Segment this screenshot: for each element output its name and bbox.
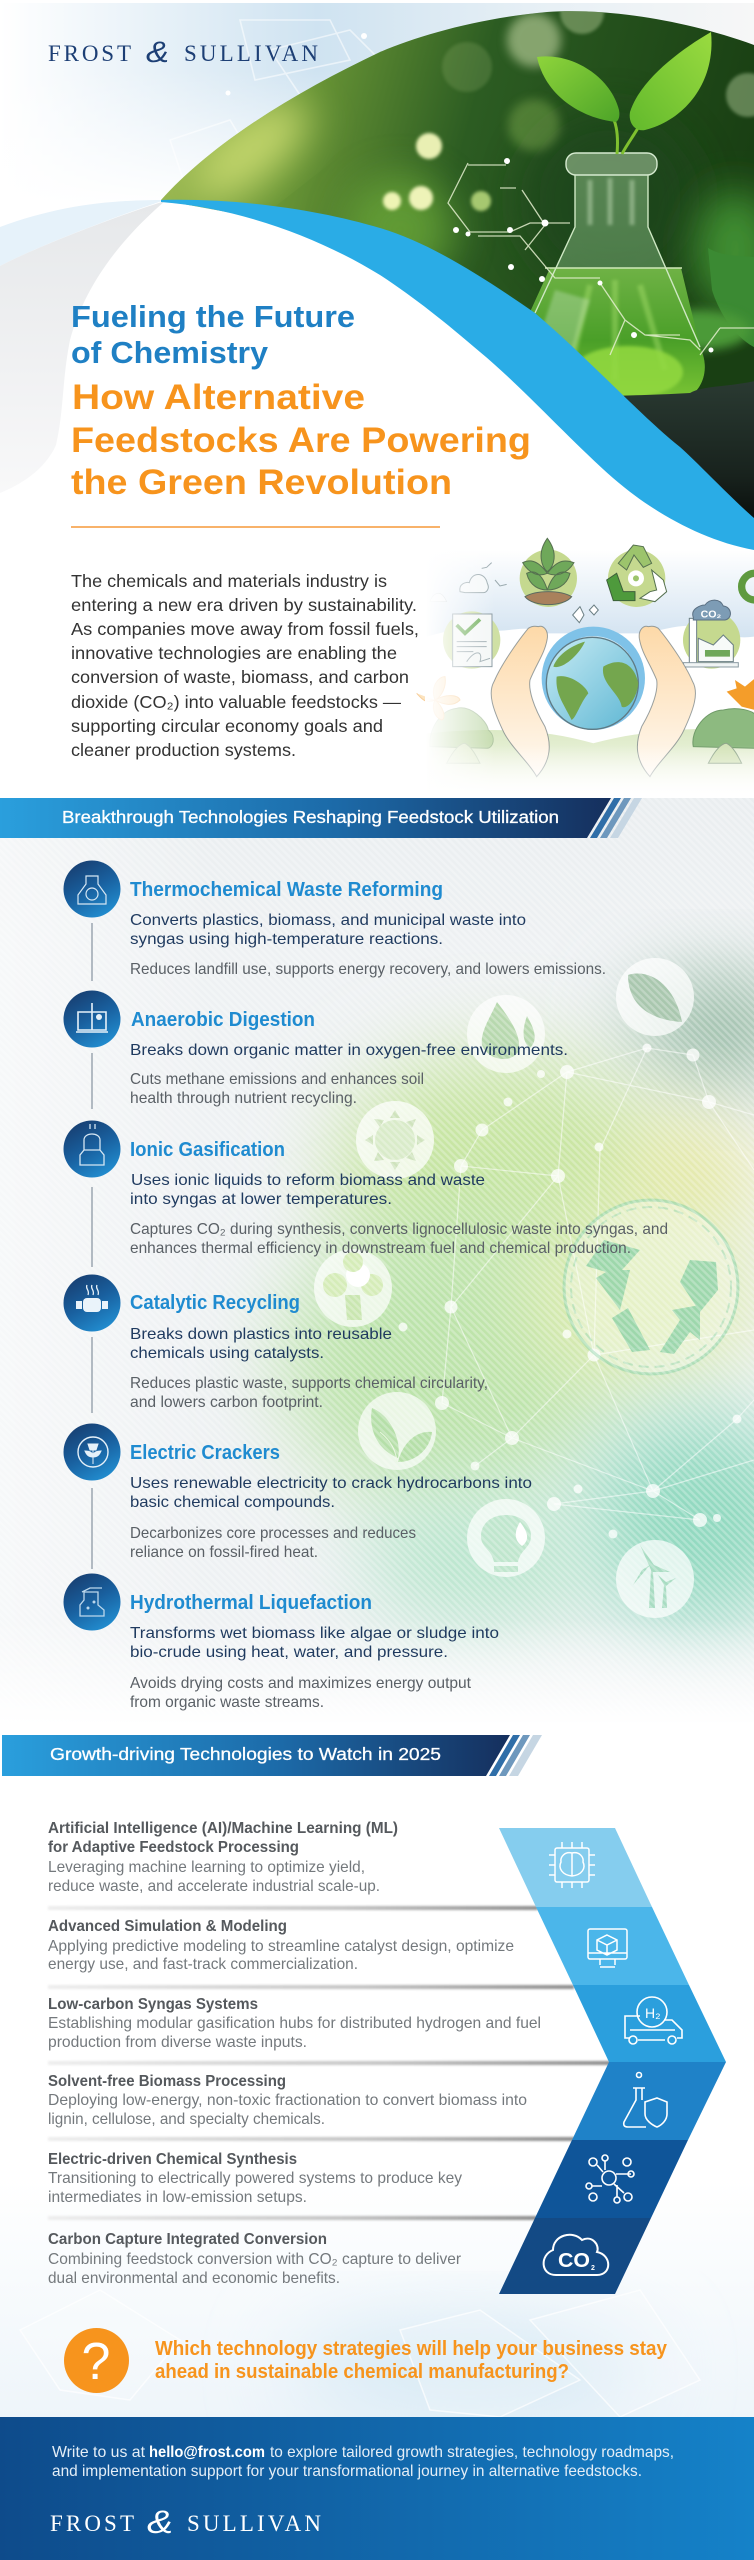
intro paragraph: supporting circular economy goals and [71,716,383,736]
intro paragraph: innovative technologies are enabling the [71,643,397,663]
intro paragraph: dioxide (CO₂) into valuable feedstocks — [71,692,401,712]
item: ionic gasification: enhances thermal efficiency in downstream fuel and chemical production. [130,1240,631,1257]
timeline connector lines [91,923,93,1569]
entry: low-carbon syngas: Establishing modular gasification hubs for distributed hydrogen and fuel [48,2015,541,2032]
entry: carbon capture: dual environmental and economic benefits. [48,2270,340,2287]
entry: electric-driven synthesis: Electric-driven Chemical Synthesis [48,2151,297,2168]
intro paragraph: conversion of waste, biomass, and carbon [71,667,409,687]
entry: AI and machine learning: reduce waste, and accelerate industrial scale-up. [48,1878,380,1895]
icon: translucent wind turbine circle [616,1540,694,1618]
item: electric crackers [64,1424,532,1561]
sprout stems and leaves [537,32,712,154]
logo top: FROST [48,41,131,66]
item: thermochemical waste reforming: syngas using high-temperature reactions. [130,931,443,948]
item: hydrothermal liquefaction: from organic waste streams. [130,1694,324,1711]
icon: translucent sun circle [356,1101,434,1179]
item: electric crackers: Electric Crackers [130,1442,280,1464]
icon: hydrogen truck [625,1997,682,2044]
footer contact text [52,2444,674,2480]
section banner: growth-driving technologies: Growth-driving Technologies to Watch in 2025 [50,1744,441,1764]
item: electric crackers: Decarbonizes core processes and reduces [130,1525,416,1542]
item: thermochemical waste reforming: Reduces landfill use, supports energy recovery, and lowers emissions. [130,961,606,978]
icon: sparkles [573,605,598,623]
title: How Alternative [72,378,365,417]
sky haze [427,550,754,637]
entry: carbon capture: Combining feedstock conversion with CO₂ capture to deliver [48,2251,462,2268]
entry: low-carbon syngas: production from diverse waste inputs. [48,2034,307,2051]
dividers [48,1906,611,2220]
network graphic [398,1044,754,1538]
item: catalytic recycling: chemicals using catalysts. [130,1345,324,1362]
section banner: breakthrough technologies [0,798,642,838]
item: catalytic recycling [64,1274,488,1411]
logo top: SULLIVAN [184,41,318,66]
icon: reformer [64,860,120,918]
item: catalytic recycling: Breaks down plastics into reusable [130,1326,392,1343]
logo footer [50,2504,321,2540]
entry: advanced simulation: Applying predictive modeling to streamline catalyst design, optimize [48,1938,514,1955]
logo top: & [146,36,169,69]
icon: translucent drop circle [467,995,545,1073]
entry: AI and machine learning: Leveraging machine learning to optimize yield, [48,1859,365,1876]
item: anaerobic digestion: Breaks down organic matter in oxygen-free environments. [130,1042,568,1059]
item: anaerobic digestion: Cuts methane emissions and enhances soil [130,1071,424,1088]
icon: translucent recycling ring [564,1200,738,1374]
icon: globe with halo [542,627,645,730]
technology list [48,1820,541,2287]
blue swoosh band [161,200,754,550]
icon: left bush and flower [417,677,493,763]
intro paragraph: cleaner production systems. [71,740,296,760]
icon: question mark: ? [82,2333,110,2391]
icon: simulation monitor [588,1929,627,1967]
logo footer: SULLIVAN [187,2511,321,2536]
item: electric crackers: reliance on fossil-fired heat. [130,1544,318,1561]
icon: CO2 cloud: CO [558,2250,590,2272]
title: Fueling the Future [71,299,355,334]
hatch overlay [261,943,754,1647]
title: the Green Revolution [71,463,452,502]
icon: recycling [607,545,667,607]
title [71,299,531,502]
ground hill [427,729,754,793]
icon: factory with CO2 cloud: CO₂ [701,609,721,620]
illustration: hands holding globe with sustainability icons [417,538,754,793]
footer contact text: and implementation support for your transformational journey in alternative feedstocks. [52,2463,642,2480]
item: ionic gasification: Captures CO₂ during synthesis, converts lignocellulosic waste into syngas, and [130,1221,668,1238]
callout: question [64,2328,668,2393]
entry: advanced simulation [48,1918,514,1973]
entry: solvent-free biomass: Solvent-free Biomass Processing [48,2073,286,2090]
logo footer: FROST [50,2511,134,2536]
icon: flask and shield [624,2072,667,2127]
icon: factory with CO2 cloud [683,600,740,669]
icon: translucent bulb circle [467,1499,545,1577]
item: thermochemical waste reforming: Thermochemical Waste Reforming [130,879,443,901]
illustration fades [425,540,754,795]
item: ionic gasification: Ionic Gasification [130,1139,285,1161]
flask [515,153,705,400]
icon: reactor [64,1574,120,1630]
entry: low-carbon syngas: Low-carbon Syngas Systems [48,1996,258,2013]
icon: digester [64,990,120,1048]
callout: question: Which technology strategies will help your business stay [155,2338,668,2360]
icon: AI chip [549,1842,595,1888]
item: ionic gasification: Uses ionic liquids to reform biomass and waste [131,1172,485,1189]
item: hydrothermal liquefaction: Transforms wet biomass like algae or sludge into [130,1625,499,1642]
callout: question: ahead in sustainable chemical manufacturing? [155,2361,569,2383]
item: hydrothermal liquefaction: Hydrothermal Liquefaction [130,1592,372,1614]
item: thermochemical waste reforming: Converts plastics, biomass, and municipal waste into [130,912,526,929]
entry: carbon capture [48,2231,462,2287]
soil [623,381,754,518]
entry: advanced simulation: Advanced Simulation & Modeling [48,1918,287,1935]
entry: electric-driven synthesis [48,2151,462,2206]
icon: translucent tree circle [314,1249,392,1327]
item: ionic gasification: into syngas at lower temperatures. [130,1191,392,1208]
icon: right bush and orange flower [693,678,754,763]
icon: gasifier [64,1120,120,1178]
entry: advanced simulation: energy use, and fast-track commercialization. [48,1956,358,1973]
item: anaerobic digestion: Anaerobic Digestion [131,1009,315,1031]
icon: approved document [443,611,500,669]
entry: low-carbon syngas [48,1996,541,2051]
icon: translucent sprout circle [358,1392,436,1470]
intro paragraph: The chemicals and materials industry is [71,571,387,591]
footer [0,2417,754,2560]
item: thermochemical waste reforming [64,860,606,978]
leaf: lower right [708,248,754,350]
item: anaerobic digestion: health through nutrient recycling. [130,1090,357,1107]
section banner: breakthrough technologies: Breakthrough Technologies Reshaping Feedstock Utilization [62,807,559,827]
entry: solvent-free biomass: Deploying low-energy, non-toxic fractionation to convert biomass into [48,2092,527,2109]
item: anaerobic digestion [64,990,568,1107]
icon: gear at right edge [742,573,754,600]
icon: plant [520,538,577,607]
logo footer: & [147,2504,173,2540]
icon: right hand [637,626,695,777]
title: of Chemistry [71,335,269,370]
section banner: growth-driving technologies [2,1735,542,1776]
intro paragraph [71,571,419,760]
entry: AI and machine learning [48,1820,398,1895]
hero photo: flask with sprout on bokeh background [161,11,754,518]
icon: translucent leaf circle [616,958,694,1036]
item: ionic gasification [64,1120,668,1257]
entry: solvent-free biomass [48,2073,527,2128]
bokeh glow [176,0,754,310]
entry: AI and machine learning: for Adaptive Feedstock Processing [48,1839,299,1856]
title rule [71,526,440,528]
icon: left hand [491,626,549,777]
left decorative swoosh [0,200,165,493]
item: hydrothermal liquefaction [64,1574,499,1711]
entry: electric-driven synthesis: intermediates in low-emission setups. [48,2189,307,2206]
footer contact text: to explore tailored growth strategies, technology roadmaps, [270,2444,674,2461]
title: Feedstocks Are Powering [71,421,531,460]
icon: CO2 cloud [544,2235,608,2275]
footer contact text: hello@frost.com [149,2444,265,2461]
icon: hydrogen truck: H₂ [645,2005,661,2021]
panel: breakthrough technologies background [0,798,754,1740]
icon: connected gears [586,2155,634,2203]
molecular hexagon network [448,158,754,355]
item: catalytic recycling: Reduces plastic waste, supports chemical circularity, [130,1375,488,1392]
logo top [48,36,318,69]
intro paragraph: entering a new era driven by sustainability. [71,595,417,615]
intro paragraph: As companies move away from fossil fuels, [71,619,419,639]
item: electric crackers: basic chemical compounds. [130,1494,335,1511]
item: catalytic recycling: and lowers carbon footprint. [130,1394,323,1411]
icon: CO2 cloud: 2 [591,2265,595,2272]
item: catalytic recycling: Catalytic Recycling [130,1292,300,1314]
entry: electric-driven synthesis: Transitioning to electrically powered systems to produce key [48,2170,462,2187]
icon: clouds and birds [430,563,507,602]
item: hydrothermal liquefaction: Avoids drying costs and maximizes energy output [130,1675,472,1692]
icon: catalytic converter [64,1274,120,1332]
chevron: six stacked segments [499,1828,726,2294]
item: hydrothermal liquefaction: bio-crude using heat, water, and pressure. [130,1644,448,1661]
entry: solvent-free biomass: lignin, cellulose, and specialty chemicals. [48,2111,325,2128]
hero background with faint tech lines [0,3,754,205]
icon: plug with leaves [64,1424,120,1480]
icon: question mark [64,2328,129,2393]
item: electric crackers: Uses renewable electricity to crack hydrocarbons into [130,1475,532,1492]
entry: AI and machine learning: Artificial Intelligence (AI)/Machine Learning (ML) [48,1820,398,1837]
footer contact text: Write to us at [52,2444,146,2461]
lower section background [0,2180,754,2420]
entry: carbon capture: Carbon Capture Integrated Conversion [48,2231,327,2248]
